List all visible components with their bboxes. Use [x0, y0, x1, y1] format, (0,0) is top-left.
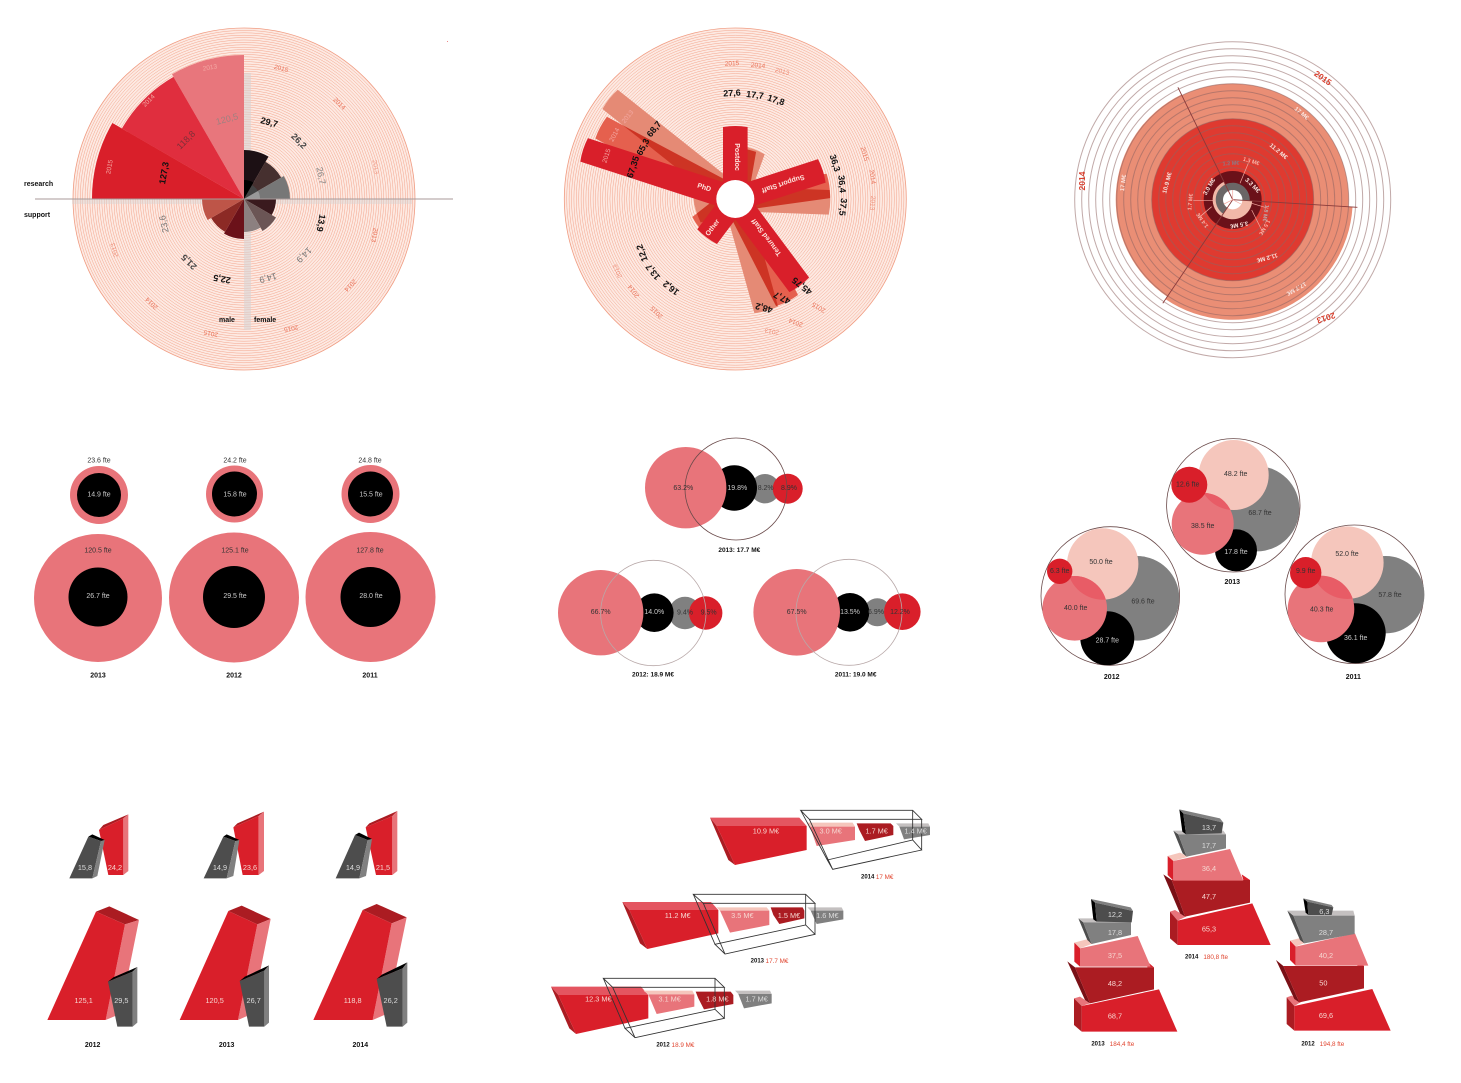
axis labels — [24, 181, 276, 324]
stack group 2013 — [1067, 899, 1177, 1048]
block group 2014: 21,5 — [376, 863, 390, 872]
value labels: 65,3 — [634, 137, 652, 157]
share group 2013: 19.8% — [727, 485, 747, 492]
stray mark — [447, 41, 448, 42]
share group 2012: 14.0% — [644, 609, 664, 616]
value labels: 14,9 — [294, 245, 314, 265]
composition group 2011: 36.1 fte — [1344, 635, 1367, 642]
year labels: 2013 — [110, 242, 120, 258]
composition group 2013: 12.6 fte — [1176, 482, 1199, 488]
value labels: 12,2 — [634, 243, 650, 263]
composition group 2011: 9.9 fte — [1296, 568, 1316, 575]
composition group 2013: 68.7 fte — [1248, 510, 1272, 517]
composition group 2013: 2013 — [1225, 579, 1240, 586]
year labels: 2014 — [788, 316, 804, 328]
block group 2012 — [47, 814, 139, 1049]
chart: 3D budget slabs — [551, 810, 930, 1049]
year labels: 2014 — [750, 62, 766, 70]
concentric rings — [1075, 42, 1391, 358]
budget labels: 1.8 M€ — [1261, 204, 1269, 222]
budget labels: 10.9 M€ — [1162, 171, 1174, 194]
composition group 2012: 6.3 fte — [1050, 568, 1070, 575]
category labels: Tenured Staff — [750, 217, 783, 257]
budget labels: 1.7 M€ — [1187, 193, 1195, 211]
budget labels: 3.0 M€ — [1203, 177, 1218, 196]
research male sectors — [92, 55, 244, 199]
dark core disc — [1204, 171, 1262, 229]
slab group 2013: 3.5 M€ — [731, 911, 754, 920]
slab group 2012: 1.8 M€ — [706, 994, 729, 1003]
value labels: 23,6 — [157, 214, 171, 234]
slab group 2012: 3.1 M€ — [658, 994, 681, 1003]
value labels: 26,7 — [314, 166, 328, 185]
block group 2013: 2013 — [219, 1042, 235, 1049]
composition group 2012: 28.7 fte — [1096, 638, 1119, 644]
slab group 2013: 1.6 M€ — [816, 911, 839, 920]
slab group 2013: 11.2 M€ — [665, 911, 691, 920]
block group 2013: 120,5 — [205, 996, 224, 1005]
research female sectors — [244, 150, 290, 199]
value labels: 120,5 — [215, 111, 239, 127]
year labels — [105, 63, 380, 338]
chart: staff composition bubbles — [1041, 439, 1424, 681]
composition group 2012: 40.0 fte — [1064, 605, 1087, 612]
stack group 2013: 68,7 — [1108, 1011, 1122, 1020]
slab group 2013: 2013 — [751, 959, 765, 965]
composition group 2012: 69.6 fte — [1131, 598, 1155, 606]
bars: 2013 — [602, 89, 831, 314]
slab group 2013: 1.5 M€ — [778, 911, 800, 920]
composition group 2013: 17.8 fte — [1224, 549, 1248, 556]
slab group 2014: 17 M€ — [876, 874, 894, 881]
year labels: 2013 — [621, 109, 636, 125]
block group 2014: 14,9 — [346, 863, 360, 872]
stack group 2012: 69,6 — [1319, 1011, 1333, 1020]
budget labels: 17.7 M€ — [1285, 280, 1307, 296]
value labels: 13,7 — [644, 262, 662, 282]
year labels: 2015 — [273, 64, 289, 74]
share group 2011: 13.5% — [840, 609, 860, 616]
year labels: 2015 — [105, 159, 115, 175]
value labels: 118,8 — [175, 129, 197, 151]
stack group 2012 — [1276, 898, 1391, 1048]
overlapping year bars — [579, 89, 831, 314]
slab group 2014: 3.0 M€ — [819, 826, 842, 835]
slab group 2014: 2014 — [861, 875, 875, 881]
axis labels: male — [219, 317, 235, 324]
year labels: 2014 — [868, 169, 877, 185]
bubble group 2013: 120.5 fte — [84, 548, 112, 554]
value labels: 67,35 — [625, 155, 641, 179]
value labels: 29,7 — [260, 115, 279, 129]
value labels: 17,8 — [766, 93, 786, 107]
bubble group 2012: 15.8 fte — [223, 492, 247, 498]
share group 2013: 8.9% — [781, 485, 797, 492]
bubble group 2012: 29.5 fte — [223, 593, 247, 600]
category labels: Postdoc — [733, 143, 740, 171]
chart: gender radial staff chart — [24, 28, 453, 370]
share group 2011: 6.9% — [868, 609, 884, 616]
stack group 2014: 2014 — [1185, 954, 1199, 960]
bubble group 2013: 14.9 fte — [87, 492, 111, 498]
budget labels: 1.5 M€ — [1257, 218, 1271, 236]
salmon total sectors — [1116, 84, 1352, 320]
bubble group 2012: 2012 — [226, 672, 242, 680]
stack group 2014: 65,3 — [1202, 924, 1216, 933]
year labels — [1077, 68, 1337, 326]
value labels: 22,5 — [212, 273, 232, 285]
stack group 2012: 50 — [1319, 978, 1327, 987]
sector dividers — [1163, 87, 1357, 303]
chart: 3D research and support blocks — [47, 811, 407, 1049]
stack group 2013: 48,2 — [1108, 979, 1122, 988]
year labels: 2015 — [725, 60, 740, 68]
bubble group 2011: 127.8 fte — [356, 548, 384, 554]
leader lines — [1193, 163, 1268, 230]
year labels: 2015 — [1312, 68, 1334, 88]
stack group 2012: 28,7 — [1319, 928, 1333, 937]
budget labels: 11.2 M€ — [1268, 143, 1289, 162]
bubble group 2011 — [306, 458, 436, 680]
year labels: 2015 — [283, 323, 299, 333]
budget labels: 17 M€ — [1120, 174, 1128, 192]
stack group 2013: 17,8 — [1108, 928, 1122, 937]
value labels: 48,2 — [754, 301, 774, 315]
share group 2013: 8.2% — [758, 485, 774, 492]
composition group 2011: 57.8 fte — [1378, 592, 1402, 599]
stack group 2012: 194,8 fte — [1320, 1041, 1345, 1048]
year labels: 2013 — [202, 63, 218, 73]
composition group 2011 — [1285, 525, 1424, 681]
share group 2012: 9.4% — [677, 610, 693, 616]
year labels: 2013 — [370, 159, 380, 175]
axis labels: female — [254, 317, 276, 324]
bubble group 2013: 26.7 fte — [86, 593, 110, 600]
block group 2012: 24,2 — [108, 863, 122, 872]
slab group 2012: 18.9 M€ — [672, 1042, 695, 1049]
budget labels: 17 M€ — [1293, 106, 1310, 122]
value labels: 45,75 — [790, 275, 814, 297]
value labels: 37,5 — [837, 198, 849, 216]
bubble group 2013: 2013 — [90, 672, 106, 680]
slab group 2012: 12.3 M€ — [585, 994, 612, 1003]
stack group 2013: 2013 — [1091, 1041, 1105, 1047]
year labels: 2013 — [369, 227, 379, 243]
block group 2013: 26,7 — [247, 996, 261, 1005]
stack group 2012: 40,2 — [1319, 951, 1333, 960]
bubble group 2011: 15.5 fte — [359, 492, 383, 498]
block group 2014 — [313, 811, 407, 1049]
year labels — [601, 60, 877, 336]
value labels: 21,5 — [179, 252, 199, 272]
bars: 2015 — [579, 126, 827, 293]
centre hole — [1223, 190, 1242, 209]
share group 2011 — [753, 559, 921, 678]
year labels: 2015 — [859, 146, 870, 162]
value labels: 68,7 — [645, 119, 663, 139]
year labels: 2015 — [811, 300, 827, 314]
budget labels: 3.5 M€ — [1229, 219, 1249, 229]
gray inner sector — [1216, 183, 1250, 214]
bars: 2014 — [594, 116, 831, 307]
share group 2013: 2013: 17.7 M€ — [718, 547, 761, 554]
composition group 2012: 50.0 fte — [1089, 559, 1113, 566]
centre hole — [716, 180, 754, 218]
composition group 2012: 2012 — [1104, 674, 1120, 681]
share group 2012: 66.7% — [591, 609, 611, 616]
year labels: 2014 — [609, 127, 622, 143]
stack group 2014: 17,7 — [1202, 841, 1216, 850]
value labels: 13,9 — [315, 213, 327, 233]
value labels: 16,2 — [661, 279, 681, 297]
year labels: 2013 — [1315, 310, 1337, 326]
red research disc — [1152, 119, 1314, 281]
slab group 2013: 17.7 M€ — [766, 958, 789, 965]
stack group 2014 — [1163, 809, 1271, 961]
category labels — [696, 143, 805, 257]
budget labels: 1.2 M€ — [1222, 161, 1240, 167]
value labels: 36,4 — [836, 175, 848, 193]
year labels: 2014 — [141, 93, 157, 109]
slab group 2014: 1.4 M€ — [904, 826, 927, 835]
value labels: 17,7 — [746, 89, 764, 101]
chart: research and support fte bubbles — [34, 458, 436, 680]
year labels: 2014 — [1077, 171, 1087, 190]
ring background disc — [73, 28, 415, 370]
bubble group 2011: 24.8 fte — [358, 458, 382, 464]
category labels: PhD — [696, 183, 712, 193]
block group 2013: 14,9 — [213, 863, 227, 872]
budget labels: 11.2 M€ — [1255, 251, 1278, 263]
value labels: 27,6 — [723, 88, 741, 98]
composition group 2011: 52.0 fte — [1335, 551, 1359, 558]
composition group 2013: 48.2 fte — [1224, 471, 1247, 478]
stack group 2014: 47,7 — [1202, 892, 1216, 901]
year labels: 2014 — [627, 283, 641, 299]
slab group 2013 — [622, 894, 843, 965]
share group 2011: 67.5% — [787, 609, 807, 616]
year labels: 2013 — [764, 326, 780, 336]
share group 2012 — [558, 560, 722, 678]
stack group 2013: 37,5 — [1108, 951, 1122, 960]
chart: 3D staff stacks — [1067, 809, 1391, 1048]
pink sectors — [1213, 182, 1252, 219]
slab group 2014: 10.9 M€ — [753, 826, 779, 835]
stack group 2012: 6,3 — [1319, 907, 1329, 916]
block group 2014: 2014 — [353, 1042, 368, 1049]
bubble group 2013: 23.6 fte — [87, 458, 111, 464]
axis ticks — [72, 73, 412, 330]
chart: budget spiral rings — [1075, 42, 1391, 358]
year labels: 2013 — [612, 263, 624, 279]
value labels: 127,3 — [157, 161, 171, 185]
value labels: 47,7 — [772, 290, 792, 306]
year labels: 2014 — [331, 96, 347, 112]
category labels: Support Staff — [760, 173, 805, 193]
budget labels: 3.3 M€ — [1243, 177, 1261, 195]
chart: budget share bubbles — [558, 438, 921, 678]
slab group 2014: 1.7 M€ — [865, 826, 888, 835]
block group 2014: 26,2 — [384, 996, 398, 1005]
stack group 2014: 36,4 — [1202, 864, 1216, 873]
bubble group 2012: 24.2 fte — [223, 458, 247, 464]
share group 2011: 12.2% — [890, 609, 910, 616]
axis labels: research — [24, 181, 53, 188]
budget labels: 1.3 M€ — [1242, 157, 1260, 167]
stack group 2013: 184,4 fte — [1110, 1041, 1135, 1048]
composition group 2011: 40.3 fte — [1310, 606, 1333, 614]
block group 2012: 15,8 — [78, 863, 92, 872]
axis labels: support — [24, 212, 51, 219]
share group 2011: 2011: 19.0 M€ — [835, 672, 877, 678]
value labels: 14,9 — [258, 271, 278, 285]
composition group 2013 — [1167, 439, 1300, 586]
bubble group 2011: 28.0 fte — [359, 593, 383, 600]
slab group 2014 — [710, 810, 930, 881]
bubble group 2012: 125.1 fte — [221, 548, 249, 554]
block group 2012: 29,5 — [114, 996, 128, 1005]
block group 2012: 125,1 — [74, 996, 93, 1005]
year labels: 2014 — [342, 277, 358, 293]
year labels: 2013 — [774, 67, 790, 77]
share group 2012: 2012: 18.9 M€ — [632, 672, 674, 678]
year labels: 2015 — [649, 304, 665, 320]
support female sectors — [244, 199, 276, 232]
share group 2013: 63.2% — [673, 485, 693, 492]
ring background disc — [564, 28, 906, 370]
slab group 2012: 2012 — [656, 1043, 670, 1049]
share group 2012: 9.5% — [701, 610, 717, 616]
block group 2014: 118,8 — [344, 996, 362, 1005]
composition group 2013: 38.5 fte — [1191, 523, 1214, 530]
budget labels: 1.4 M€ — [1196, 211, 1210, 229]
share group 2013 — [645, 438, 803, 554]
value labels — [157, 111, 328, 285]
chart: staff category radial bars — [564, 28, 906, 370]
stack group 2014: 180,8 fte — [1203, 954, 1228, 961]
bubble group 2013 — [34, 458, 162, 680]
budget labels — [1120, 106, 1310, 296]
block group 2013: 23,6 — [243, 863, 257, 872]
block group 2012: 2012 — [85, 1042, 101, 1049]
year labels: 2014 — [144, 295, 160, 311]
value labels: 26,2 — [289, 131, 309, 151]
composition group 2011: 2011 — [1346, 674, 1361, 681]
value labels: 36,3 — [828, 153, 842, 173]
year labels: 2015 — [601, 148, 613, 164]
block group 2013 — [180, 812, 271, 1049]
value labels — [625, 88, 849, 315]
category labels: Other — [705, 218, 722, 238]
stack group 2012: 2012 — [1301, 1041, 1315, 1047]
bubble group 2012 — [169, 458, 299, 680]
year labels: 2015 — [203, 328, 219, 338]
year labels: 2013 — [868, 195, 876, 211]
composition group 2012 — [1041, 527, 1180, 681]
slab group 2012: 1.7 M€ — [745, 994, 768, 1003]
slab group 2012 — [551, 978, 772, 1049]
bubble group 2011: 2011 — [362, 672, 378, 680]
horizontal axis — [35, 198, 453, 200]
stack group 2013: 12,2 — [1108, 910, 1122, 919]
support male sectors — [202, 199, 244, 239]
stack group 2014: 13,7 — [1202, 823, 1216, 832]
